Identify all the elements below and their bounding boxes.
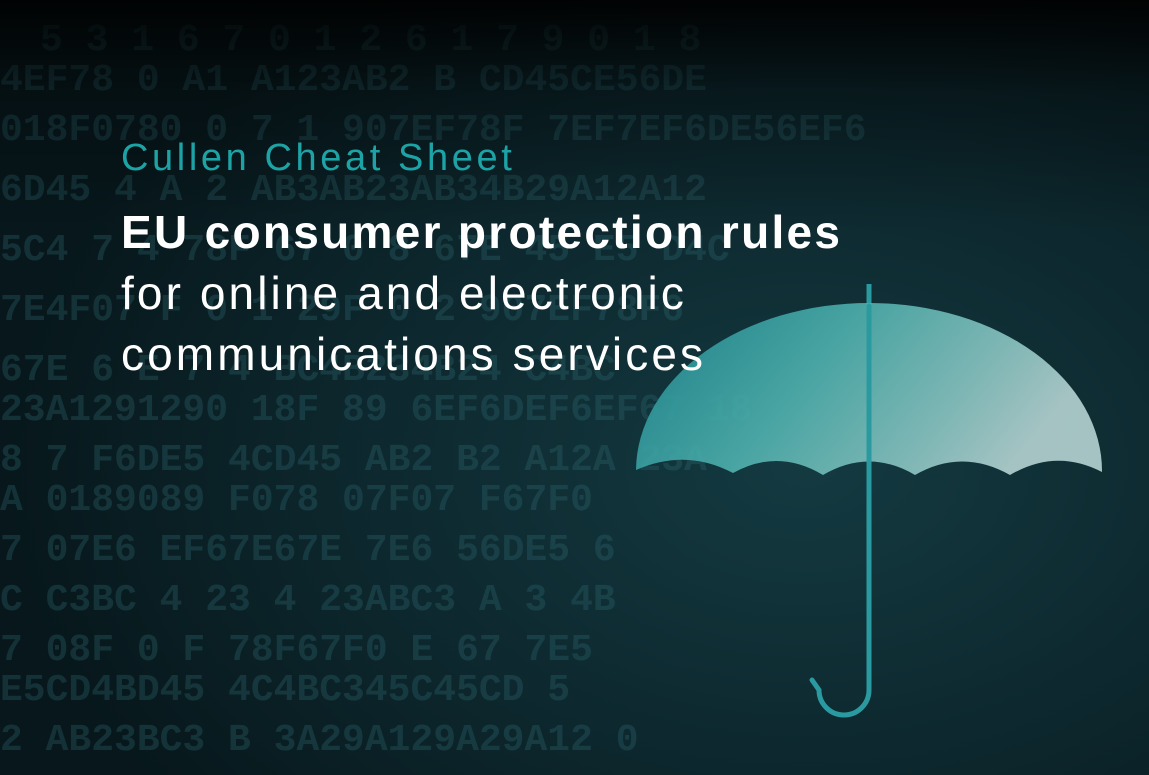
background: hex code texture: 6D45 4 A 2 AB3AB23AB34B29A12A12	[0, 169, 707, 212]
background: hex code texture: C C3BC 4 23 4 23ABC3 A 3 4B	[0, 579, 616, 622]
title	[121, 206, 842, 380]
background: hex code texture: A 0189089 F078 07F07 F67F0	[0, 479, 593, 522]
background: hex code texture: 2 AB23BC3 B 3A29A129A29A12 0	[0, 719, 639, 762]
subtitle: Cullen Cheat Sheet: Cullen Cheat Sheet	[121, 137, 515, 179]
background: hex code texture: 7 07E6 EF67E67E 7E6 56DE5 6	[0, 529, 616, 572]
title: EU consumer protection rules	[121, 206, 842, 258]
background: hex code texture: 7 08F 0 F 78F67F0 E 67 7E5	[0, 629, 593, 672]
background: hex code texture: 018F0780 0 7 1 907EF78F 7EF7EF6DE56EF6	[0, 109, 867, 152]
background: hex code texture: 5 3 1 6 7 0 1 2 6 1 7 9 0 1 8	[40, 19, 701, 62]
background: hex code texture: 67E 6 E 7 4 BC4B234B24 C4BC	[0, 349, 616, 392]
background: hex code texture: 23A1291290 18F 89 6EF6DEF6EF67 18	[0, 389, 753, 432]
background: hex code texture: 4EF78 0 A1 A123AB2 B CD45CE56DE	[0, 59, 707, 102]
title: for online and electronic	[121, 267, 687, 319]
background: hex code texture: 5C4 7 4 78F 67 0 8 67E 45 E5 D4C	[0, 229, 730, 272]
background: hex code texture: 8 7 F6DE5 4CD45 AB2 B2 A12A 23A	[0, 439, 707, 482]
background: hex code texture: 7E4F07 F 0 1 29F 0 2 907EF78F6	[0, 289, 684, 332]
background: hex code texture: E5CD4BD45 4C4BC345C45CD 5	[0, 669, 570, 712]
title: communications services	[121, 328, 706, 380]
